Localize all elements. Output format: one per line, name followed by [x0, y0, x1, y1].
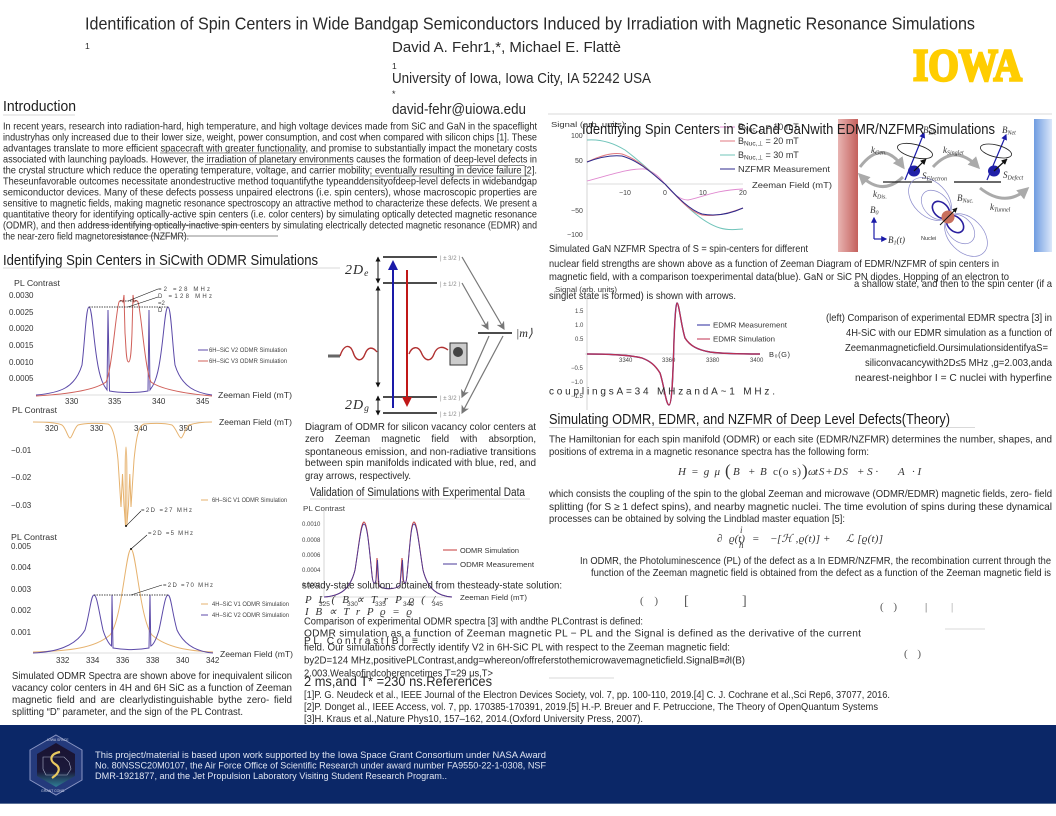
title: Identification of Spin Centers in Wide Bandgap Semiconductors Induced by Irradiation with Magnetic Resonance Simulations	[85, 14, 975, 34]
chart: EDMR spectrum	[555, 287, 790, 410]
equation fragments: [	[684, 594, 689, 609]
text block: introduction: (ODMR), and then address identifying optically-inactive spin centers by simulating electrically detected magnetic resonance (EDMR) and	[3, 220, 537, 232]
chart: EDMR spectrum: 0.5	[575, 337, 584, 343]
chart: 6H-SiC V1 ODMR: 350	[179, 424, 193, 433]
text block: PL and current definitions	[580, 556, 1051, 579]
chart: 6H-SiC V2 and V3 ODMR: 0.0025	[9, 308, 34, 317]
text block: steady-state and comparison text: PL Contrast[B] ≡	[304, 636, 420, 647]
diagram: EDMR/NZFMR of spin centers: Nuclei	[921, 236, 936, 242]
text block: ODMR spectra caption: vacancy color centers in 4H and 6H SiC as a function of Zeeman	[12, 683, 292, 694]
chart: 4H-SiC V1 and V2 ODMR: 332	[56, 656, 70, 665]
chart: GaN NZFMR spectra: −10	[619, 190, 631, 197]
diagram: EDMR/NZFMR of spin centers: S	[1003, 170, 1008, 180]
text block: ODMR spectra caption: magnetic field and are clearlydistinguishable bythe zero- field	[12, 695, 292, 706]
equation: Hamiltonian: (	[725, 461, 731, 480]
equation: Lindblad master equation: =	[752, 533, 759, 545]
chart: 4H-SiC V1 and V2 ODMR: 338	[146, 656, 160, 665]
diagram: ODMR energy levels: g	[364, 404, 370, 414]
chart: GaN NZFMR spectra: Signal (arb. units)	[551, 120, 626, 129]
diagram: EDMR/NZFMR of spin centers: B	[888, 235, 894, 245]
chart: EDMR spectrum: 3340	[619, 358, 633, 364]
equation: Hamiltonian: B	[760, 466, 767, 478]
diagram: ODMR energy levels: 2D	[345, 398, 364, 413]
text block: diagram caption: gray arrows, respectively.	[305, 471, 411, 482]
chart: ODMR validation: PL Contrast	[303, 506, 345, 513]
chart: GaN NZFMR spectra: B	[738, 136, 744, 146]
diagram: EDMR/NZFMR of spin centers: k	[873, 189, 877, 199]
heading: EDMR/NZFMR simulations: Identifying Spin Centers in SiCand GaNwith EDMR/NZFMR Simulations	[582, 122, 995, 138]
text block: NZFMR caption: Simulated GaN NZFMR Spectra of S = spin-centers for different	[549, 244, 808, 255]
text block: diagram caption: zero Zeeman magnetic field with absorption,	[305, 434, 536, 445]
chart: EDMR spectrum: 1.5	[575, 309, 584, 315]
chart: 4H-SiC V1 and V2 ODMR: 0.005	[11, 542, 32, 551]
diagram: EDMR/NZFMR of spin centers: B	[870, 205, 876, 215]
text block: steady-state and comparison text: I B ∝ T r P ϱ = ϱ	[304, 606, 412, 618]
diagram: EDMR/NZFMR of spin centers: S	[922, 171, 926, 181]
equation: Hamiltonian: c(o s)	[773, 466, 801, 478]
chart: 4H-SiC V1 and V2 ODMR: 334	[86, 656, 100, 665]
diagram: EDMR/NZFMR of spin centers: B	[923, 125, 928, 135]
chart: 6H-SiC V2 and V3 ODMR: 0.0005	[9, 374, 34, 383]
chart: 6H-SiC V2 and V3 ODMR: =2	[158, 301, 166, 307]
authors block: University of Iowa, Iowa City, IA 52242 USA	[392, 71, 651, 87]
chart: GaN NZFMR spectra: 50	[575, 158, 583, 165]
chart: 6H-SiC V2 and V3 ODMR: 340	[152, 397, 166, 406]
chart: ODMR validation: ODMR Measurement	[460, 560, 535, 569]
chart: 4H-SiC V1 and V2 ODMR: 4H–SiC V2 ODMR Simulation	[212, 613, 289, 619]
chart: GaN NZFMR spectra	[551, 120, 832, 240]
chart: GaN NZFMR spectra: Nuc,⊥	[744, 140, 763, 148]
diagram: EDMR/NZFMR of spin centers: k	[990, 202, 994, 212]
text block: Hamiltonian intro: The Hamiltonian for each spin manifold (ODMR) or each site (EDMR/NZFMR) determines the number, shapes, and	[549, 434, 1052, 446]
chart: GaN NZFMR spectra: 0	[663, 190, 667, 197]
text block: spin coupling description: processes can be obtained by solving the Lindblad master equation [5]:	[549, 514, 845, 525]
text block: references	[304, 690, 890, 725]
chart: 6H-SiC V1 ODMR: Zeeman Field (mT)	[219, 418, 292, 427]
text block: introduction: In recent years, research into radiation-hard, high temperature, and high voltage devices made from SiC and GaN in the spaceflight	[3, 122, 537, 132]
diagram: EDMR/NZFMR of spin centers: Tunnel	[994, 208, 1011, 214]
equation fragments: ( )	[904, 648, 921, 660]
chart: 6H-SiC V1 ODMR	[11, 406, 292, 527]
chart: 6H-SiC V1 ODMR: −0.03	[11, 501, 32, 510]
chart: EDMR spectrum: EDMR Measurement	[713, 322, 787, 330]
diagram: EDMR/NZFMR of spin centers: k	[871, 145, 875, 155]
text block: references: [2]P. Donget al., IEEE Access, vol. 7, pp. 170385-170391, 2019.[5] H.-P. Breuer and F. Petruccione, The Theory of OpenQuantum Systems	[304, 702, 878, 713]
text block: ODMR spectra caption	[12, 671, 292, 718]
diagram: ODMR energy levels: | ± 3/2 ⟩	[440, 255, 461, 262]
diagram: EDMR/NZFMR of spin centers: Electron	[926, 176, 947, 182]
diagram: ODMR energy levels: | ± 1/2 ⟩	[440, 411, 461, 418]
chart: GaN NZFMR spectra: = 30 mT	[763, 150, 799, 160]
text block: steady-state and comparison text: steady-state solution: obtained from thesteady-state solution:	[302, 580, 562, 592]
authors block: 1	[392, 61, 397, 71]
text block: spin coupling description: splitting (for S ≥ 1 defect spins), and nearby magnetic nuclei. The time evolution of spins during these dynamical	[549, 502, 1052, 513]
chart: 6H-SiC V2 and V3 ODMR: 0.0015	[9, 341, 34, 350]
equation: Hamiltonian	[677, 461, 922, 480]
chart: ODMR validation: 345	[432, 601, 443, 608]
text block: couplings: couplingsA=34 MHzandA~1 MHz.	[549, 386, 778, 398]
chart: EDMR spectrum: 3360	[662, 358, 676, 364]
chart: 6H-SiC V1 ODMR: 340	[134, 424, 148, 433]
text block: Hamiltonian intro: positions of extrema in a magnetic resonance spectra has the following form:	[549, 447, 869, 458]
chart: ODMR validation: 330	[347, 601, 358, 608]
chart: ODMR validation: Zeeman Field (mT)	[460, 593, 528, 602]
chart: 6H-SiC V2 and V3 ODMR: D	[158, 308, 163, 314]
text block: steady-state and comparison text: by2D=124 MHz,positivePLContrast,andg=whereon/offreferstothemicrowavemagneticfield.SignalB≡∂I(B)	[304, 656, 745, 666]
text block: introduction: semiconductor devices. Many of these defects possess unpaired electrons (i.e. spin centers), whose macroscopic properties are	[3, 188, 537, 198]
chart: 4H-SiC V1 and V2 ODMR: 0.002	[11, 606, 32, 615]
text block: diagram caption: spontaneous emission, and non-radiative transitions	[305, 447, 536, 458]
chart: GaN NZFMR spectra: = 20 mT	[763, 136, 799, 146]
chart: 6H-SiC V2 and V3 ODMR: D =128 MHz	[158, 294, 212, 300]
chart: 4H-SiC V1 and V2 ODMR: =2D =70 MHz	[163, 583, 213, 589]
text block: introduction: Theseunfavorable outcomes necessitate anondestructive method toquantifythe typeanddensityofdeep-level defects in widebandgap	[3, 176, 537, 188]
diagram: EDMR/NZFMR of spin centers: (t)	[896, 235, 905, 245]
chart: GaN NZFMR spectra: Zeeman Field (mT)	[752, 180, 832, 190]
chart: 6H-SiC V1 ODMR: 320	[45, 424, 59, 433]
chart: ODMR validation: 0.0004	[302, 568, 321, 574]
chart: 4H-SiC V1 and V2 ODMR: Zeeman Field (mT)	[220, 650, 293, 659]
chart: GaN NZFMR spectra: NZFMR Measurement	[738, 164, 831, 174]
equation fragments: ]	[742, 594, 747, 609]
heading: references: 2 ms,and T* =230 ns.References	[304, 673, 492, 689]
chart: ODMR validation	[302, 506, 535, 608]
diagram: EDMR/NZFMR of spin centers	[838, 119, 1052, 265]
footer band	[0, 725, 1056, 804]
text block: spin coupling description	[548, 489, 1052, 525]
chart: EDMR spectrum: 3380	[706, 358, 720, 364]
chart: 6H-SiC V2 and V3 ODMR: 335	[108, 397, 122, 406]
chart: 4H-SiC V1 and V2 ODMR: =2D =5 MHz	[148, 531, 193, 537]
diagram: ODMR energy levels: 2D	[345, 263, 364, 278]
equation fragments: |	[925, 601, 927, 613]
chart: ODMR validation: 335	[375, 601, 386, 608]
chart: 4H-SiC V1 and V2 ODMR: 336	[116, 656, 130, 665]
text block: steady-state and comparison text	[302, 580, 861, 680]
equation: Hamiltonian: )	[802, 461, 808, 480]
text block: acknowledgement: DMR-1921877, and the Jet Propulsion Laboratory Visiting Student Research Program..	[95, 771, 447, 781]
text block: acknowledgement: This project/material is based upon work supported by the Iowa Space Grant Consortium under NASA Award	[95, 750, 546, 760]
chart: 6H-SiC V1 ODMR: 6H–SiC V1 ODMR Simulation	[212, 498, 287, 504]
logo: Iowa wordmark: IOWA	[913, 40, 1022, 90]
text block: ODMR spectra caption: splitting “D” parameter, and the sign of the PL Contrast.	[12, 707, 243, 718]
diagram: EDMR/NZFMR of spin centers: k	[943, 145, 947, 155]
affiliation superscript: 1	[85, 41, 90, 51]
chart: EDMR spectrum: −1.5	[571, 394, 584, 400]
equation fragments	[640, 594, 953, 660]
diagram: ODMR energy levels	[328, 255, 533, 418]
chart: GaN NZFMR spectra: 20	[739, 190, 747, 197]
chart: 6H-SiC V2 and V3 ODMR: 0.0030	[9, 291, 34, 300]
chart: 6H-SiC V2 and V3 ODMR: 345	[196, 397, 210, 406]
equation: Hamiltonian: B	[733, 466, 740, 478]
chart: GaN NZFMR spectra: B	[738, 150, 744, 160]
chart: GaN NZFMR spectra: −50	[571, 208, 583, 215]
text block: NZFMR caption: singlet state is formed) is shown with arrows.	[549, 291, 736, 302]
heading: validation: Validation of Simulations with Experimental Data	[310, 487, 526, 499]
chart: 4H-SiC V1 and V2 ODMR: 0.004	[11, 563, 32, 572]
chart: GaN NZFMR spectra: −100	[567, 232, 583, 239]
diagram: EDMR/NZFMR of spin centers: Gen.	[875, 150, 886, 156]
text block: ODMR spectra caption: Simulated ODMR Spectra are shown above for inequivalent silicon	[12, 671, 292, 682]
equation: Hamiltonian: +	[748, 466, 755, 478]
equation fragments: ( )	[640, 595, 658, 607]
chart: 6H-SiC V1 ODMR: −0.01	[11, 446, 32, 455]
text block: NZFMR caption: nuclear field strengths are shown above as a function of Zeeman Diagram of EDMR/NZFMR of spin centers in	[549, 259, 999, 270]
diagram: EDMR/NZFMR of spin centers: 0	[876, 210, 878, 216]
equation: Lindblad master equation: [ℋ ,ϱ(t)]	[777, 533, 820, 545]
chart: ODMR validation: 0.0008	[302, 538, 321, 544]
diagram: EDMR/NZFMR of spin centers: Defect	[1006, 174, 1023, 182]
chart: GaN NZFMR spectra: 100	[571, 133, 583, 140]
text block: diagram caption	[305, 422, 536, 482]
chart: 6H-SiC V2 and V3 ODMR	[9, 279, 292, 406]
authors block: david-fehr@uiowa.edu	[392, 102, 526, 118]
chart: 6H-SiC V2 and V3 ODMR: 6H–SiC V3 ODMR Simulation	[209, 359, 287, 365]
chart: 6H-SiC V2 and V3 ODMR: 0.0010	[9, 358, 34, 367]
chart: ODMR validation: 0.0002	[302, 583, 321, 589]
text block: steady-state and comparison text: 2.003.Wealsofindcoherencetimes T=29 μs,T>	[304, 668, 493, 680]
chart: ODMR validation: 325	[319, 601, 330, 608]
chart: 4H-SiC V1 and V2 ODMR: PL Contrast	[11, 533, 58, 542]
text block: diagram caption: Diagram of ODMR for silicon vacancy color centers at	[305, 422, 536, 433]
chart: ODMR validation: 0.0010	[302, 522, 321, 528]
chart: EDMR spectrum: Signal (arb. units)	[555, 287, 617, 294]
text block: Hamiltonian intro	[549, 434, 1052, 458]
heading: theory: Simulating ODMR, EDMR, and NZFMR of Deep Level Defects(Theory)	[549, 412, 950, 428]
equation fragments: ( )	[880, 601, 897, 613]
equation: Hamiltonian: A	[897, 466, 905, 478]
text block: introduction: the crystal structure which reduce the operating temperature, voltage, and carrier mobility; eventually resulting in device failure [2].	[3, 166, 537, 176]
equation: Hamiltonian: H = g μ	[677, 466, 720, 478]
text block: EDMR caption	[826, 313, 1052, 384]
equation: Hamiltonian: · I	[912, 466, 922, 478]
text block: references: [3]H. Kraus et al.,Nature Phys10, 157–162, 2014.(Oxford University Press, 2007).	[304, 714, 643, 725]
text block: introduction: associated with launching payloads. However, the irradiation of planetary environments causes the formation of deep-level defects in	[3, 154, 537, 166]
chart: EDMR spectrum: −1.0	[571, 380, 584, 386]
icon: Iowa Space Grant Consortium badge	[30, 735, 82, 795]
equation: Lindblad master equation	[717, 525, 883, 550]
text block: NZFMR caption	[549, 244, 1052, 302]
chart: 4H-SiC V1 and V2 ODMR: 4H–SiC V1 ODMR Simulation	[212, 602, 289, 608]
equation: Lindblad master equation: ∂	[717, 533, 722, 545]
text block: steady-state and comparison text: ODMR simulation as a function of Zeeman magnetic PL − PL and the Signal is defined as the derivative of the current	[304, 628, 861, 640]
chart: EDMR spectrum: EDMR Simulation	[713, 336, 775, 344]
chart: EDMR spectrum: 1.0	[575, 323, 584, 329]
chart: 4H-SiC V1 and V2 ODMR: 340	[176, 656, 190, 665]
authors block: David A. Fehr1,*, Michael E. Flattè	[392, 39, 621, 56]
chart: GaN NZFMR spectra: = 10 mT	[763, 122, 799, 132]
text block: NZFMR caption: magnetic field, with a comparison toexperimental data(blue). GaN or SiC PN diodes. Hopping of an electron to	[549, 272, 1009, 283]
authors block	[392, 39, 651, 118]
equation: Hamiltonian: ωt S + D S	[808, 466, 848, 478]
chart: 6H-SiC V2 and V3 ODMR: 6H–SiC V2 ODMR Simulation	[209, 348, 287, 354]
heading: ODMR simulations: Identifying Spin Centers in SiCwith ODMR Simulations	[3, 253, 318, 269]
authors block: *	[392, 89, 396, 99]
icon: Iowa Space Grant Consortium badge: GRANT CONS.	[41, 789, 65, 793]
text block: steady-state and comparison text: field. Our simulations correctly identify V2 in 6H-SiC PL with respect to the Zeeman magnetic field:	[304, 642, 730, 654]
chart: EDMR spectrum: 3400	[750, 358, 764, 364]
diagram: ODMR energy levels: | ± 1/2 ⟩	[440, 281, 461, 288]
chart: 6H-SiC V1 ODMR: =2D =27 MHz	[141, 508, 192, 514]
text block: EDMR caption: nearest-neighbor I = C nuclei with hyperfine	[855, 373, 1052, 384]
chart: EDMR spectrum: −0.5	[571, 366, 584, 372]
diagram: ODMR energy levels: |m⟩	[516, 326, 533, 340]
chart: ODMR validation: ODMR Simulation	[460, 546, 519, 555]
text block: introduction: sensitive to magnetic fields, making magnetic resonance spectroscopy an attractive method to characterize these defects. We present a	[3, 198, 537, 210]
diagram: EDMR/NZFMR of spin centers: Singlet	[947, 150, 964, 156]
diagram: EDMR/NZFMR of spin centers: 1	[894, 240, 896, 246]
text block: steady-state and comparison text: Comparison of experimental ODMR spectra [3] with andthe PLContrast is defined:	[304, 616, 643, 628]
chart: ODMR validation: 0.0006	[302, 553, 321, 559]
chart: 6H-SiC V1 ODMR: −0.02	[11, 473, 32, 482]
equation fragments: |	[951, 601, 953, 613]
diagram: ODMR energy levels: | ± 3/2 ⟩	[440, 395, 461, 402]
diagram: ODMR energy levels: e	[364, 269, 369, 279]
text block: acknowledgement: No. 80NSSC20M0107, the Air Force Office of Scientific Research under award number FA9550-22-1-0308, NSF	[95, 760, 547, 770]
chart: GaN NZFMR spectra: 10	[699, 190, 707, 197]
chart: 6H-SiC V2 and V3 ODMR: Zeeman Field (mT)	[218, 391, 292, 400]
text block: acknowledgement	[95, 750, 547, 781]
chart: 6H-SiC V2 and V3 ODMR: 0.0020	[9, 324, 34, 333]
chart: EDMR spectrum: B₀(G)	[769, 350, 790, 359]
diagram: EDMR/NZFMR of spin centers: Ele	[928, 130, 937, 136]
text block: introduction: the near-zero field magnetoresistance (NZFMR).	[3, 232, 189, 242]
equation: Hamiltonian: + S ·	[857, 466, 878, 478]
diagram: EDMR/NZFMR of spin centers: B	[957, 193, 962, 203]
text block: introduction: quantitative theory for identifying optically-active spin centers (i.e. color centers) by simulating optically detected magnetic resonance	[3, 210, 537, 220]
chart: 6H-SiC V2 and V3 ODMR: 330	[65, 397, 79, 406]
heading: introduction: Introduction	[3, 99, 76, 115]
chart: GaN NZFMR spectra: Nuc,⊥	[744, 154, 763, 162]
text block: diagram caption: between spin manifolds indicated with blue, red, and	[305, 458, 536, 469]
chart: 4H-SiC V1 and V2 ODMR: 0.001	[11, 628, 32, 637]
equation: Lindblad master equation: ħ	[739, 540, 744, 550]
diagram: EDMR/NZFMR of spin centers: Dis.	[876, 194, 887, 200]
text block: introduction: advantages translate to more efficient spacecraft with greater functionality, and promise to substantially impact the monetary costs	[3, 144, 537, 154]
diagram: EDMR/NZFMR of spin centers: Nuc.	[962, 198, 974, 204]
equation: Lindblad master equation: +	[823, 533, 830, 545]
text block: introduction	[3, 122, 537, 242]
chart: 4H-SiC V1 and V2 ODMR	[11, 531, 293, 665]
chart: 6H-SiC V1 ODMR: PL Contrast	[12, 406, 58, 415]
chart: 6H-SiC V1 ODMR: 330	[90, 424, 104, 433]
equation: Lindblad master equation: ℒ [ϱ(t)]	[846, 533, 883, 545]
equation: Lindblad master equation: i	[740, 525, 743, 535]
text block: references: [1]P. G. Neudeck et al., IEEE Journal of the Electron Devices Society, vol. 7, pp. 100-110, 2019.[4] C. J. Cochrane et al.,Sci Rep6, 37077, 2016.	[304, 690, 890, 701]
chart: 4H-SiC V1 and V2 ODMR: 0.003	[11, 585, 32, 594]
equation: Lindblad master equation: −	[770, 533, 777, 545]
chart: 6H-SiC V2 and V3 ODMR: PL Contrast	[14, 279, 61, 288]
text block: steady-state and comparison text: P L ( B ∝ T r P ϱ ( /	[304, 594, 436, 606]
diagram: EDMR/NZFMR of spin centers: B	[1002, 125, 1008, 135]
chart: ODMR validation: 340	[403, 601, 414, 608]
equation: Lindblad master equation: ϱ(t)	[729, 533, 745, 545]
chart: GaN NZFMR spectra: Nuc,⊥	[744, 126, 763, 134]
chart: 6H-SiC V2 and V3 ODMR: =2 =28 MHz	[158, 287, 210, 293]
icon: Iowa Space Grant Consortium badge: IOWA SPACE	[47, 738, 69, 742]
text block: introduction: industryhas only increased due to their lower size, weight, power consumption, and cost when compared with silicon chips [1]. These	[3, 132, 537, 144]
chart: GaN NZFMR spectra: B	[738, 122, 744, 132]
chart: 4H-SiC V1 and V2 ODMR: 342	[206, 656, 220, 665]
diagram: EDMR/NZFMR of spin centers: Net	[1006, 130, 1016, 136]
